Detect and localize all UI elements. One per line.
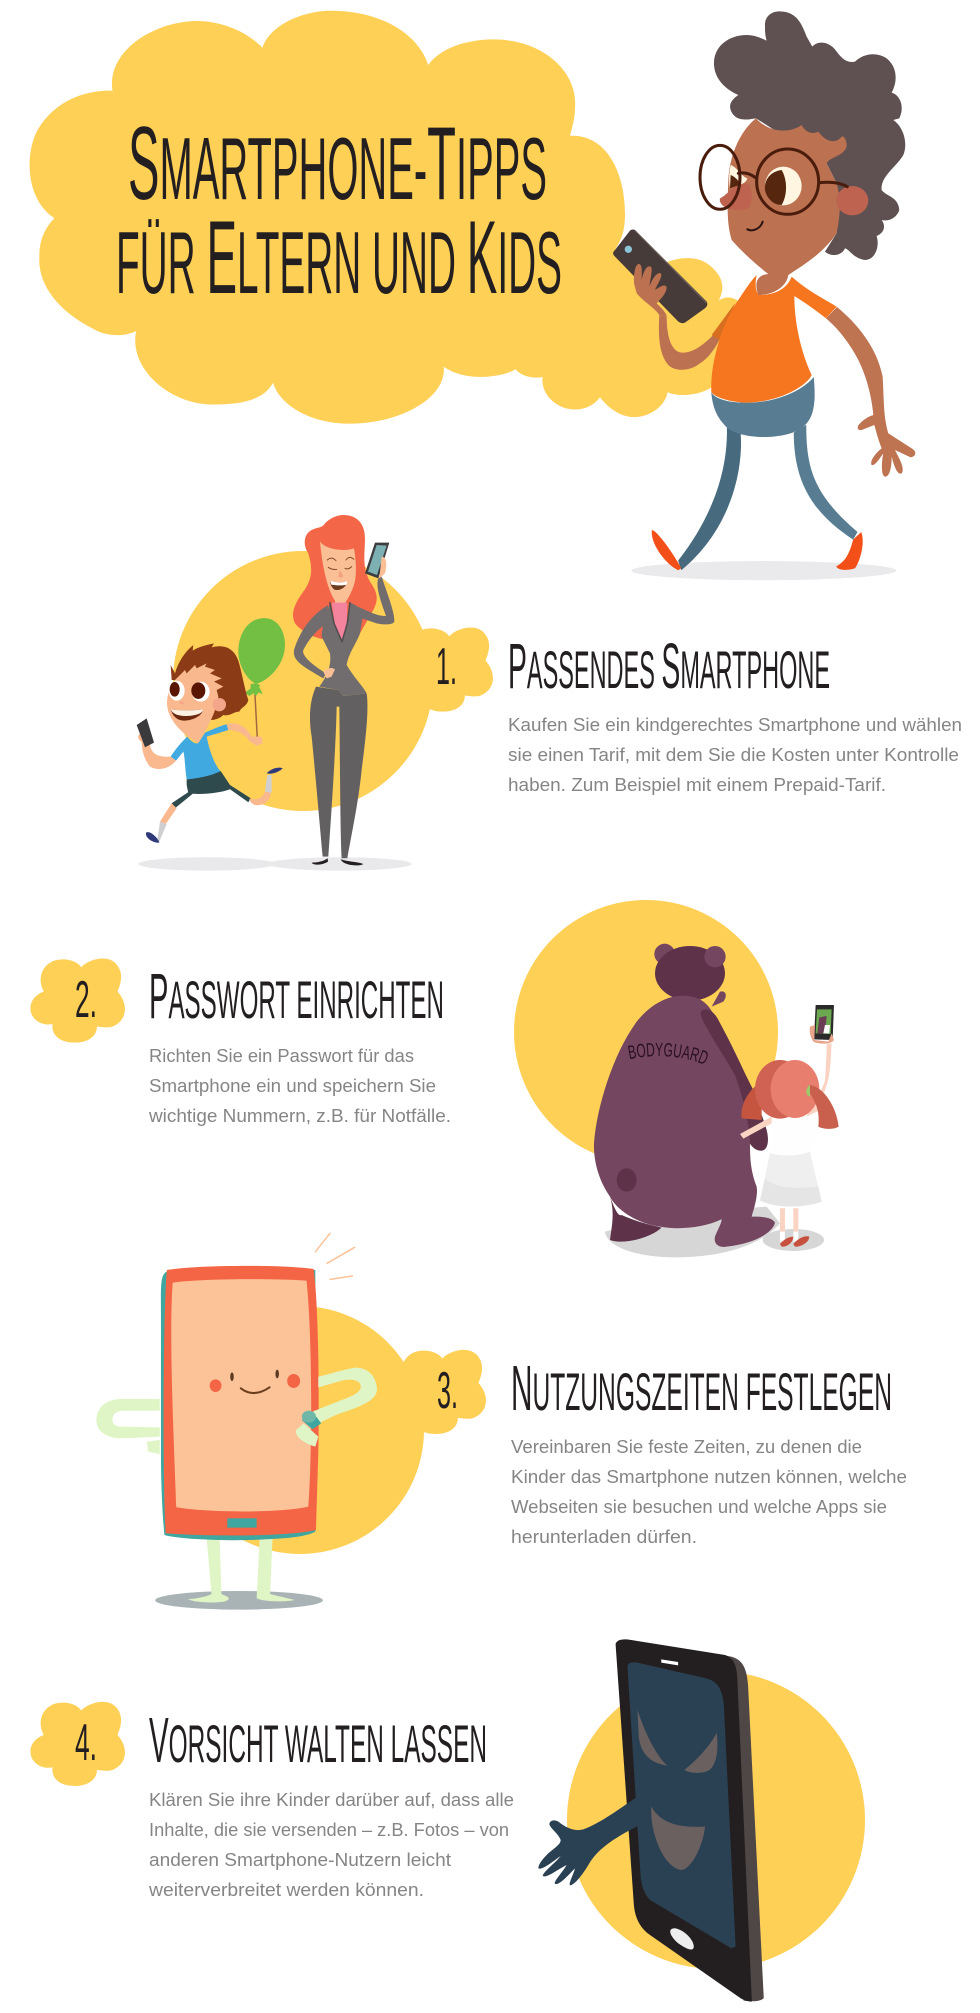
title: [116, 106, 562, 316]
text block 2: Richten Sie ein Passwort für das: [149, 1045, 414, 1066]
number cloud: [398, 628, 493, 712]
text block 1: [508, 714, 962, 795]
background circle: [514, 900, 778, 1164]
number 4: 4.: [75, 1714, 97, 1772]
text block 2: [148, 1045, 451, 1126]
text block 3: herunterladen dürfen.: [511, 1526, 697, 1547]
text block 1: haben. Zum Beispiel mit einem Prepaid-Tarif.: [508, 774, 886, 795]
panel: tip 1: [137, 515, 962, 871]
title: FÜR ELTERN UND KIDS: [116, 200, 562, 316]
background circle: [173, 551, 433, 811]
text block 4: Inhalte, die sie versenden – z.B. Fotos – von: [149, 1819, 509, 1840]
illustration: bear bodyguard and girl: [594, 944, 839, 1258]
number cloud: [30, 959, 125, 1043]
text block 3: Vereinbaren Sie feste Zeiten, zu denen die: [511, 1436, 862, 1457]
text block 1: Kaufen Sie ein kindgerechtes Smartphone und wählen: [508, 714, 962, 735]
illustration: mother and boy: [137, 515, 412, 871]
number 2: 2.: [75, 971, 97, 1029]
text block 4: [148, 1789, 514, 1900]
text block 2: wichtige Nummern, z.B. für Notfälle.: [148, 1105, 451, 1126]
title cloud: [30, 11, 738, 424]
number cloud: [391, 1350, 486, 1434]
text block 3: Webseiten sie besuchen und welche Apps sie: [511, 1496, 887, 1517]
panel: tip 1: 1.: [436, 638, 457, 696]
panel: tip 4: VORSICHT WALTEN LASSEN: [149, 1704, 487, 1776]
text block 4: Klären Sie ihre Kinder darüber auf, dass alle: [149, 1789, 514, 1810]
text block 4: anderen Smartphone-Nutzern leicht: [149, 1849, 451, 1870]
panel: tip 4: [30, 1639, 865, 2002]
text block 1: sie einen Tarif, mit dem Sie die Kosten unter Kontrolle: [508, 744, 959, 765]
illustration: bear bodyguard and girl: BODYGUARD: [628, 1042, 708, 1064]
illustration: sinister smartphone: [538, 1639, 764, 2002]
panel: tip 3: [96, 1233, 907, 1610]
text block 3: Kinder das Smartphone nutzen können, welche: [511, 1466, 907, 1487]
panel: tip 3: 3.: [437, 1362, 458, 1420]
panel: tip 2: PASSWORT EINRICHTEN: [149, 960, 444, 1032]
background circle: [567, 1671, 865, 1969]
illustration: smartphone character: [96, 1233, 377, 1610]
title: SMARTPHONE-TIPPS: [128, 106, 547, 222]
text block 2: Smartphone ein und speichern Sie: [149, 1075, 436, 1096]
panel: tip 2: [30, 900, 839, 1258]
background circle: [176, 1306, 424, 1554]
number cloud: [30, 1702, 125, 1786]
text block 3: [511, 1436, 907, 1547]
illustration: girl with smartphone: [613, 11, 915, 580]
panel: header: [30, 11, 915, 580]
text block 4: weiterverbreitet werden können.: [148, 1879, 424, 1900]
